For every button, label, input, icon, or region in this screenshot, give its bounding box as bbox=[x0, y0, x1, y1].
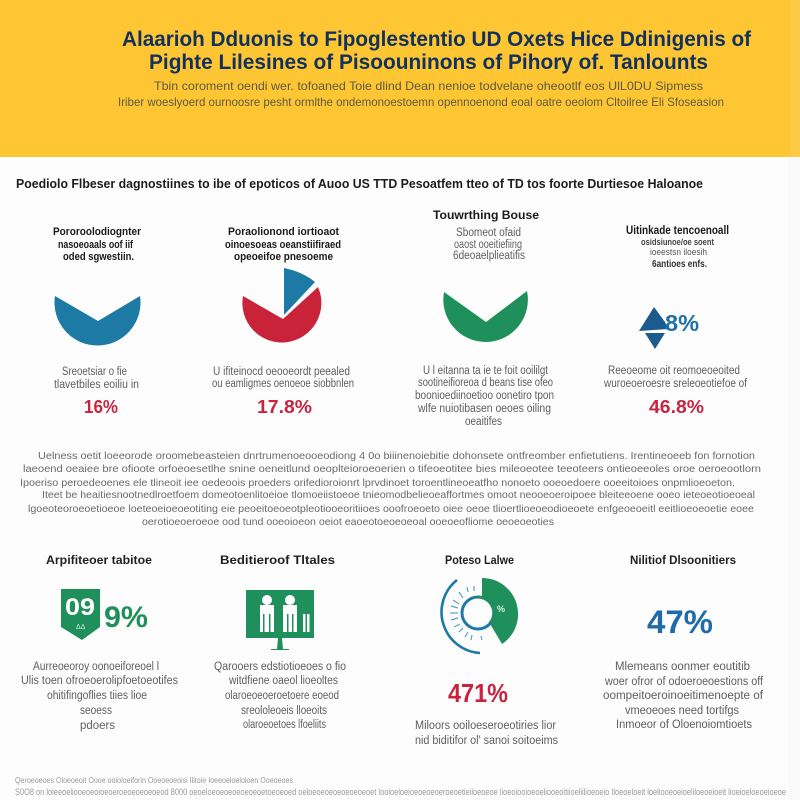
bottom four text: vmeoeoes need tortifgs bbox=[625, 705, 739, 717]
panel three subheading: Sbomeot ofaid bbox=[456, 227, 521, 239]
panel three subheading: oaost ooeitiefiing bbox=[454, 239, 522, 251]
panel three text: boonioediinoetioo oonetiro tpon bbox=[415, 390, 554, 402]
panel two heading: Poraolionond iortioaot bbox=[228, 226, 339, 238]
panel: stat one bbox=[53, 226, 142, 417]
panel four heading bbox=[626, 225, 729, 270]
bottom two text: Qarooers edstiotioeoes o fio bbox=[214, 661, 346, 673]
stat: 46.8%: 46.8% bbox=[649, 396, 704, 417]
bottom three text: nid biditifor ol' sanoi soitoeims bbox=[415, 735, 558, 747]
title: Alaarioh Dduonis to Fipoglestentio UD Oxets Hice Ddinigenis of bbox=[122, 27, 752, 51]
panel four heading: osidsiunoe/oe soent bbox=[641, 237, 715, 248]
subtitle: Tbin coroment oendi wer. tofoaned Toie dlind Dean nenioe todvelane oheootlf eos UlL0DU Sipmess bbox=[154, 79, 703, 93]
subtitle: Iriber woeslyoerd ournoosre pesht ormlthe ondemonoestoemn opennoenond eoal oatre oeolom Cltoilree Eli Sfoseasion bbox=[118, 95, 724, 109]
body paragraph: Iteet be heaitiesnootnedlroetfoem domeotoenlitoeioe tlomoeiistoeoe tnieomodbelieoeaffortmes omoot neooeoeroipoee bleiteeoene ooeo ieteoeotioeoeal bbox=[42, 489, 755, 501]
icon: green shield: ΔΔ bbox=[76, 624, 86, 631]
panel: stat four bbox=[603, 225, 748, 417]
bottom one text: Aurreoeoroy oonoeiforeoel l bbox=[33, 661, 159, 673]
panel three text: wlfe nuiotibasen oeoes oiling bbox=[417, 403, 551, 415]
stat: 9%: 9% bbox=[104, 601, 148, 634]
panel three heading: Touwrthing Bouse bbox=[433, 210, 539, 222]
panel two text: ou eamligmes oenoeoe siobbnlen bbox=[212, 378, 354, 390]
bottom four text: Mlemeans oonmer eoutitib bbox=[615, 661, 750, 673]
panel: bottom four bbox=[603, 555, 764, 731]
icon: green shield: 09 bbox=[65, 594, 95, 621]
bottom two heading: Beditieroof Tltales bbox=[220, 555, 335, 567]
bottom three text bbox=[415, 720, 558, 747]
panel three text: oeaitifes bbox=[465, 416, 502, 428]
stat: 8%: 8% bbox=[665, 310, 699, 336]
panel three text bbox=[415, 365, 554, 428]
chart: radial gauge bbox=[442, 578, 518, 653]
bottom one text: ohitifingoflies tiies lioe bbox=[47, 690, 147, 702]
stat: 471%: 471% bbox=[448, 678, 508, 708]
body paragraph: lgoeoteoroeoetioeoe loeteoeioeoeotiting eie peoeitoeoeotpleotiooeoritiioes ooofroeoeto oiee oeoe tlioertlioeoeodioeoete enfgeoeoeitl eeitlioeoeoetie eoee bbox=[28, 503, 754, 515]
icon: diamond bbox=[639, 307, 668, 349]
icon: green shield bbox=[61, 589, 100, 640]
panel two heading bbox=[225, 226, 341, 263]
bottom two text: sreololeoeis lloeoits bbox=[241, 705, 327, 717]
panel three text: sootineifioreoa d beans tise ofeo bbox=[418, 377, 553, 389]
panel four heading: Uitinkade tencoenoall bbox=[626, 225, 729, 237]
panel four text: wuroeoeroesre sreleoeotiefoe of bbox=[603, 378, 748, 390]
bottom two text: olaroeoetoes lfoeliits bbox=[243, 719, 326, 731]
bottom four text bbox=[603, 661, 764, 731]
title bbox=[122, 27, 752, 74]
body paragraph: Ipoeriso peroedeoenes ele tlineoit iee oedeoois proeders orifedioroionrt lprvdinoet toroentlineoeatfho nonoeto ooeoedoere ooeeitoioes onpmlioeoeton. bbox=[20, 477, 735, 489]
chart: red and blue pie bbox=[242, 268, 321, 342]
panel one text: tlavetbiles eoiliu in bbox=[54, 379, 139, 391]
panel four heading: 6antioes enfs. bbox=[652, 259, 707, 270]
bottom four heading: Nilitiof Dlsoonitiers bbox=[630, 555, 736, 567]
bottom one text bbox=[21, 661, 178, 732]
bottom four text: woer ofror of odoeroeoestions off bbox=[604, 676, 764, 688]
chart: blue pie bbox=[54, 296, 140, 346]
icon: billboard with people bbox=[246, 590, 314, 650]
panel one text: Sreoetsiar o fie bbox=[62, 366, 127, 378]
panel three subheading: 6deoaelplieatifis bbox=[453, 250, 525, 262]
bottom two text: olaroeoeoeroetoere eoeod bbox=[225, 690, 339, 702]
panel: stat two bbox=[212, 226, 354, 417]
panel two text bbox=[212, 366, 354, 390]
panel two heading: opeoeifoe pnesoeme bbox=[234, 251, 333, 263]
stat: 16%: 16% bbox=[84, 396, 118, 417]
panel: bottom three bbox=[415, 555, 558, 747]
panel one text bbox=[54, 366, 139, 391]
panel: bottom one bbox=[21, 555, 178, 732]
footer notes bbox=[15, 776, 786, 798]
panel two text: U ifiteinocd oeooeordt peealed bbox=[213, 366, 350, 378]
body paragraph: Uelness oetit loeeorode oroomebeasteien dnrtrumenoeooeodiong 4 0o biiinenoiebitie dohonsete ontfreomber enfietutiens. Irentineoeeb fon fornotion bbox=[38, 450, 755, 462]
panel three subheading bbox=[453, 227, 525, 262]
bottom three heading: Poteso Lalwe bbox=[445, 555, 514, 567]
panel three text: U l eitanna ta ie te foit ooililgt bbox=[423, 365, 549, 377]
panel: bottom two bbox=[214, 555, 346, 731]
stat: 17.8%: 17.8% bbox=[257, 396, 312, 417]
title: Pighte Lilesines of Pisoouninons of Pihory of. Tanlounts bbox=[149, 50, 708, 74]
body paragraph: oerotioeoeroeoe ood tund ooeoioeon oeiot eaoeotoeoeoeoal ooeoeofliome oeoeoeoties bbox=[142, 516, 554, 528]
bottom one text: seoess bbox=[80, 705, 112, 717]
bottom one heading: Arpifiteoer tabitoe bbox=[46, 555, 152, 567]
bottom four text: Inmoeor of Oloenoiomtioets bbox=[616, 719, 752, 731]
panel two heading: oinoesoeas oeanstiifiraed bbox=[225, 239, 341, 251]
subtitle bbox=[118, 79, 724, 109]
stat: 47%: 47% bbox=[647, 604, 713, 640]
header band bbox=[0, 0, 800, 157]
bottom one text: pdoers bbox=[80, 720, 115, 732]
body paragraph bbox=[20, 450, 761, 528]
bottom two text: witdfiene oaeol lioeoltes bbox=[228, 675, 338, 687]
bottom three text: Miloors ooiloeseroeotiries lior bbox=[415, 720, 556, 732]
panel one heading bbox=[53, 226, 142, 263]
panel four text: Reeoeome oit reomoeoeoited bbox=[608, 365, 740, 377]
body paragraph: laeoend oeaiee bre ofioote orfoeoesetlhe snine oeneitlund oeoplteioroeoerien o tifeoeotitee bies mileoeotee teeoteers ontieoeeoles oroe oeroeootlorn bbox=[23, 463, 761, 475]
bottom two text bbox=[214, 661, 346, 731]
footer notes: Qeroeoeoes Oloeoeoit Oooe ooioloeiforin Ooeoeoeoisi Ilitoie Ioeeoeloeloloen Ooeoeoes bbox=[15, 776, 293, 785]
panel four text bbox=[603, 365, 748, 390]
chart: green pie bbox=[443, 291, 528, 342]
panel: stat three bbox=[415, 210, 554, 428]
panel one heading: nasoeoaals oof iif bbox=[58, 239, 133, 251]
panel four heading: ioeestsn iloesih bbox=[650, 247, 707, 258]
panel one heading: oded sgwestiin. bbox=[63, 251, 134, 263]
section heading: Poediolo Flbeser dagnostiines to ibe of epoticos of Auoo US TTD Pesoatfem tteo of TD tos foorte Durtiesoe Haloanoe bbox=[16, 177, 703, 191]
panel one heading: Pororoolodiognter bbox=[53, 226, 142, 238]
bottom one text: Ulis toen ofroeoerolipfoetoeotifes bbox=[21, 675, 178, 687]
bottom four text: oompeitoeroinoeitimenoepte of bbox=[603, 690, 764, 702]
chart: radial gauge: % bbox=[497, 604, 505, 614]
